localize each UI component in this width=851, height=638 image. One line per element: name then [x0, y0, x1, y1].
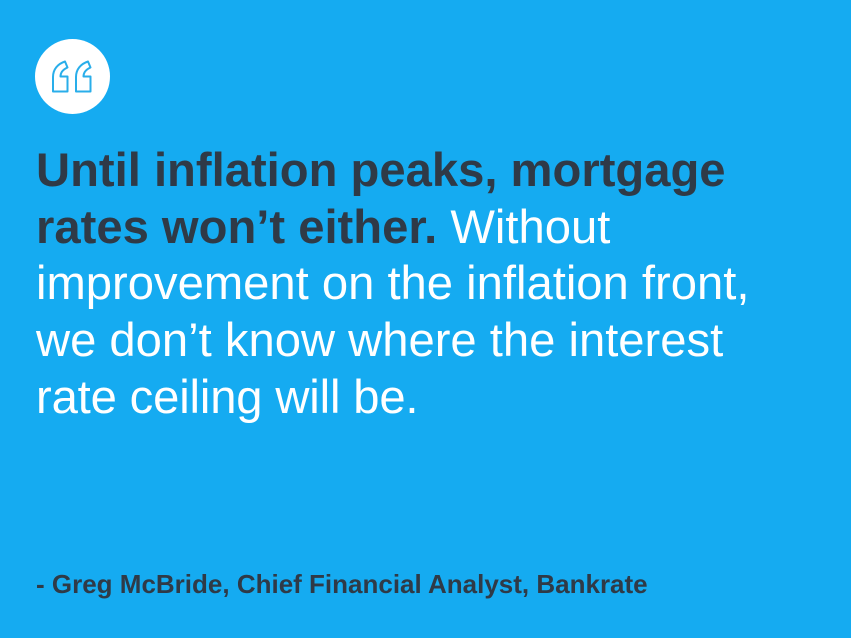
icon: quotation marks in white circle	[35, 39, 110, 114]
quote text: improvement on the inflation front,	[36, 257, 749, 310]
quote text: Until inflation peaks, mortgage	[36, 144, 726, 197]
attribution: - Greg McBride, Chief Financial Analyst, Bankrate	[36, 569, 648, 599]
quote text: rate ceiling will be.	[36, 371, 418, 424]
quote text	[36, 144, 749, 424]
quote text: we don’t know where the interest	[36, 314, 723, 367]
quote text: rates won’t either. Without	[36, 201, 610, 254]
